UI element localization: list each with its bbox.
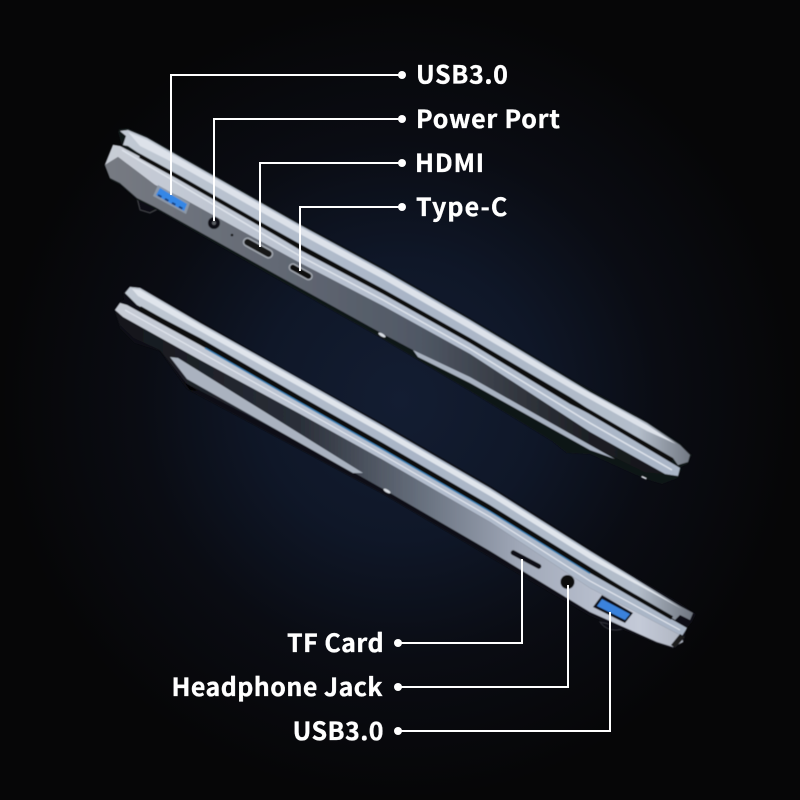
lid band [125,287,693,620]
hinge highlights [378,332,647,479]
lower silver streak [413,350,615,459]
callout: USB3.0 [171,56,509,195]
callout: Type-C [300,188,508,271]
gap line between lid and base [140,308,672,618]
blue hairline [205,348,590,574]
callout: Headphone Jack [171,585,568,704]
laptop: bottom view with right ports [114,285,696,649]
TF card slot [510,549,542,570]
callout: USB3.0: USB3.0 [416,56,509,92]
end cap [671,634,685,648]
callout: TF Card [287,559,522,660]
silhouette [104,128,692,484]
USB port [153,185,190,214]
headphone jack [560,575,574,589]
Type-C port [288,263,313,281]
base face [105,157,665,474]
callout: USB3.0: USB3.0 [293,712,384,748]
callout: USB3.0 [293,612,610,748]
lid highlight [128,132,676,444]
callout: Headphone Jack: Headphone Jack [171,668,383,704]
LED dot [231,234,233,236]
strip highlight [125,310,680,630]
base strip [115,303,687,636]
HDMI port [242,237,274,259]
strip highlight [122,150,672,470]
laptop: top view with left ports [104,128,692,484]
callout: HDMI [260,144,485,247]
lid highlight [132,289,682,609]
callout: Power Port: Power Port [416,100,561,136]
USB port [593,595,633,623]
callout: Type-C: Type-C [416,188,508,224]
base strip [105,145,680,476]
base face [115,310,683,647]
callout: TF Card: TF Card [287,624,384,660]
foot shadow [184,382,198,391]
foot [137,198,158,213]
silhouette [114,285,696,649]
foot [600,622,628,630]
gap line between lid and base [140,156,672,460]
hinge highlight [383,488,391,494]
lid band [120,130,690,465]
callout: Power Port [214,100,561,221]
callout: HDMI: HDMI [415,144,485,180]
lower silver streak [170,357,363,473]
power jack [208,217,220,229]
